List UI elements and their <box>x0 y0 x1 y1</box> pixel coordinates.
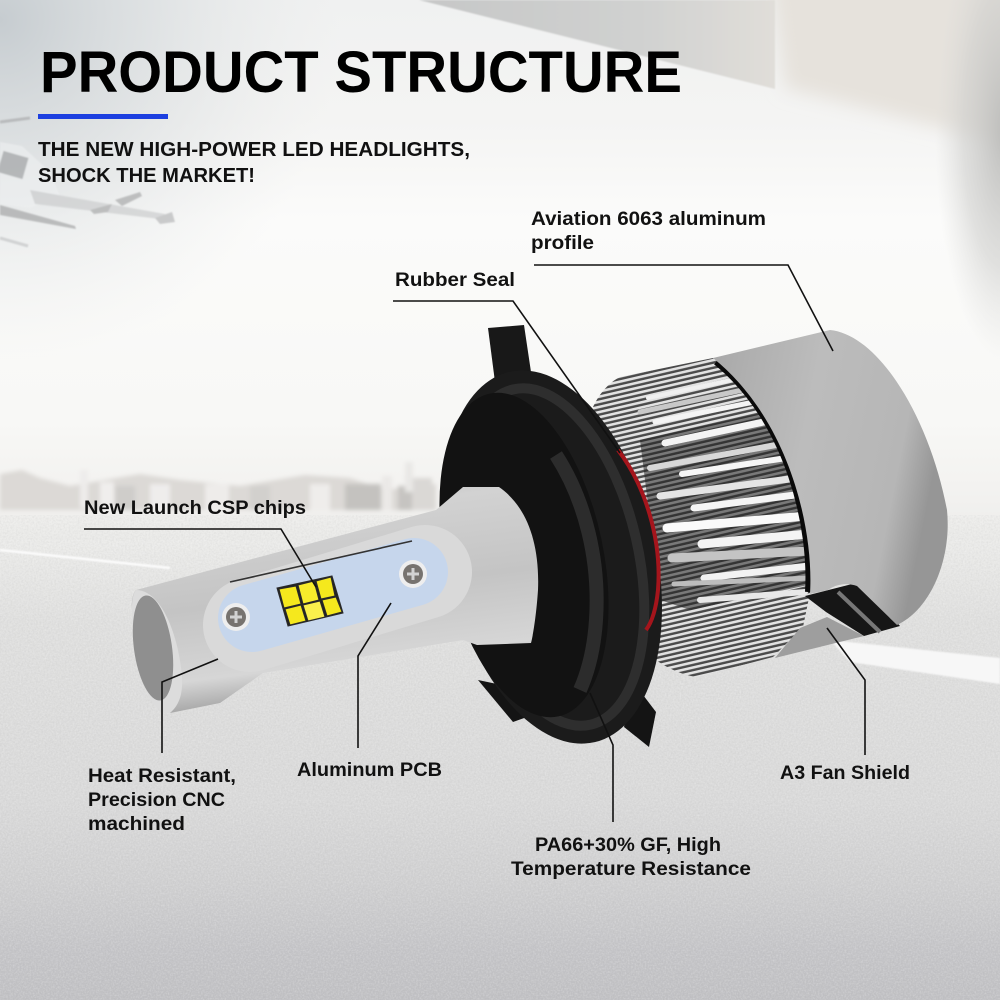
screw left <box>222 603 250 631</box>
fan shield: cable channel <box>805 582 900 636</box>
callout: aviation aluminum profile: Aviation 6063 aluminum <box>531 209 766 230</box>
road marking left <box>0 550 170 568</box>
callout: PA66 <box>511 693 751 880</box>
individual fins <box>640 378 810 600</box>
locating tab bottom right <box>624 683 656 747</box>
shadow under shield edge <box>716 362 808 592</box>
product: LED bulb <box>127 325 948 766</box>
rubber seal ring <box>618 450 659 630</box>
callout: CSP chips: New Launch CSP chips <box>84 498 306 519</box>
callout: aluminum PCB: Aluminum PCB <box>297 760 442 781</box>
tube end cap <box>127 590 182 713</box>
callout: CSP chips <box>84 498 316 587</box>
heat sink fin block <box>593 358 810 677</box>
disc textured ring <box>556 455 597 690</box>
locating tab top <box>488 325 531 382</box>
black front disc face <box>412 377 636 733</box>
fan shield: outer cylinder <box>713 330 948 625</box>
blue PCB plate <box>252 572 414 618</box>
callout: A3 fan shield: A3 Fan Shield <box>780 763 910 784</box>
fan shield: lower wing <box>775 617 864 658</box>
textured collar band <box>430 370 674 744</box>
title: PRODUCT STRUCTURE <box>40 40 682 105</box>
PCB shadow edge <box>230 541 412 582</box>
aluminum tube neck <box>132 487 538 713</box>
callout: rubber seal <box>393 270 620 453</box>
screw right <box>399 560 427 588</box>
road marking right <box>830 640 1000 684</box>
callout: aluminum PCB <box>297 603 442 781</box>
callout: PA66: PA66+30% GF, High <box>535 835 721 856</box>
callout: aviation aluminum profile: profile <box>531 233 594 254</box>
callout: rubber seal: Rubber Seal <box>395 270 515 291</box>
black rear flange <box>408 348 696 766</box>
callout: aviation aluminum profile <box>531 209 833 351</box>
subtitle <box>38 138 470 187</box>
road noise texture <box>0 515 1000 1000</box>
callout: A3 fan shield <box>780 628 910 784</box>
subtitle: SHOCK THE MARKET! <box>38 164 255 187</box>
callout: heat resistant: machined <box>88 814 185 835</box>
PCB aluminum frame <box>250 572 425 625</box>
subtitle: THE NEW HIGH-POWER LED HEADLIGHTS, <box>38 138 470 161</box>
callout: heat resistant <box>88 659 236 835</box>
callout: heat resistant: Precision CNC <box>88 790 225 811</box>
icon: helicopter <box>0 118 175 246</box>
title accent bar <box>38 114 168 119</box>
CSP LED chips <box>277 576 343 626</box>
callout: PA66: Temperature Resistance <box>511 859 751 880</box>
callout: heat resistant: Heat Resistant, <box>88 766 236 787</box>
city skyline <box>0 462 436 510</box>
locating tab bottom left <box>478 680 527 722</box>
